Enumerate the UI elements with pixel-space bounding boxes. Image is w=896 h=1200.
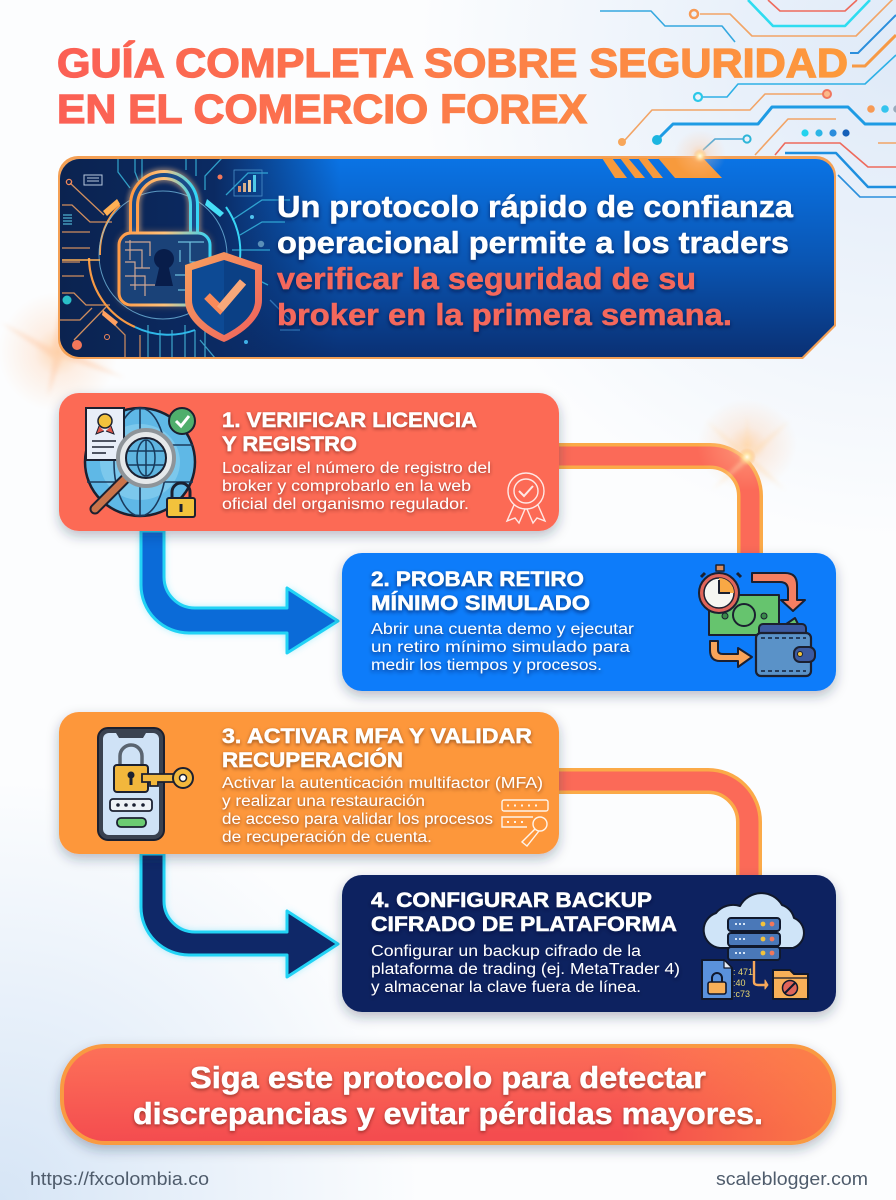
icon: phone with padlock and key xyxy=(98,728,193,840)
arrow: step 3 to step 4 xyxy=(559,781,749,875)
step 1 text: oficial del organismo regulador. xyxy=(222,496,469,513)
hero statement: operacional permite a los traders xyxy=(277,225,789,260)
hero statement: verificar la seguridad de su xyxy=(277,261,696,296)
arrow: step 1 to step 2 xyxy=(559,399,797,553)
step 1 heading xyxy=(222,409,477,456)
step 3 heading xyxy=(222,725,532,772)
step 4 text: Configurar un backup cifrado de la xyxy=(371,943,641,960)
step 4 heading: CIFRADO DE PLATAFORMA xyxy=(371,913,677,936)
step 4 heading: 4. CONFIGURAR BACKUP xyxy=(371,889,652,912)
footer: credit: scaleblogger.com xyxy=(716,1169,868,1189)
step 1 text: Localizar el número de registro del xyxy=(222,460,491,477)
icon: globe and magnifier xyxy=(85,408,195,517)
code snippets beside file: :40 xyxy=(733,978,746,988)
step 2 heading: MÍNIMO SIMULADO xyxy=(371,592,590,615)
callout: closing message: discrepancias y evitar pérdidas mayores. xyxy=(133,1096,763,1131)
arrow: step 3 down to step 4 xyxy=(141,854,338,977)
icon: cloud, servers, encrypted file and folder xyxy=(702,893,808,999)
circuit decoration top right xyxy=(600,0,896,197)
panel: step 2 xyxy=(342,553,836,691)
footer: source url: https://fxcolombia.co xyxy=(30,1169,209,1189)
step 4 heading xyxy=(371,889,677,936)
step 3 text: de acceso para validar los procesos xyxy=(222,811,493,828)
step 1 heading: 1. VERIFICAR LICENCIA xyxy=(222,409,477,432)
step 3 text: y realizar una restauración xyxy=(222,793,425,810)
hero statement xyxy=(277,189,794,332)
step 3 heading: RECUPERACIÓN xyxy=(222,748,403,772)
step 2 text: Abrir una cuenta demo y ejecutar xyxy=(371,621,634,638)
panel: step 3 xyxy=(59,712,559,854)
callout: closing message xyxy=(60,1044,836,1145)
icon: stopwatch, money and wallet xyxy=(699,565,815,676)
step 3 text: de recuperación de cuenta. xyxy=(222,829,432,846)
hero statement: broker en la primera semana. xyxy=(277,297,732,332)
arrow: step 1 down to step 2 xyxy=(141,531,338,653)
step 4 text: y almacenar la clave fuera de línea. xyxy=(371,979,641,996)
step 4 text xyxy=(371,943,680,996)
code snippets beside file: : 471 xyxy=(733,967,753,977)
step 2 heading xyxy=(371,568,590,615)
step 1 text xyxy=(222,460,491,513)
hero statement: Un protocolo rápido de confianza xyxy=(277,189,794,224)
title: GUÍA COMPLETA SOBRE SEGURIDAD xyxy=(57,40,848,86)
decorative glow: bottom left of hero xyxy=(0,292,125,412)
panel: hero banner xyxy=(58,156,838,360)
hero corner stripes xyxy=(602,158,722,178)
step 2 text xyxy=(371,621,634,674)
title xyxy=(57,40,848,132)
code snippets beside file: :c73 xyxy=(733,989,750,999)
title: EN EL COMERCIO FOREX xyxy=(57,86,587,132)
decorative glow: top of hero xyxy=(674,130,726,178)
step 3 heading: 3. ACTIVAR MFA Y VALIDAR xyxy=(222,725,532,748)
step 4 text: plataforma de trading (ej. MetaTrader 4) xyxy=(371,961,680,978)
step 1 text: broker y comprobarlo en la web xyxy=(222,478,471,495)
callout: closing message: Siga este protocolo para detectar xyxy=(190,1060,706,1095)
icon: password and key outline xyxy=(502,800,548,846)
panel: step 4 xyxy=(342,875,836,1012)
step 2 text: un retiro mínimo simulado para xyxy=(371,639,630,656)
panel: step 1 xyxy=(59,393,559,531)
code snippets beside file xyxy=(733,967,753,999)
step 2 heading: 2. PROBAR RETIRO xyxy=(371,568,584,591)
step 3 text: Activar la autenticación multifactor (MFA) xyxy=(222,775,543,792)
hero illustration: circuit padlock and shield xyxy=(60,158,300,358)
step 3 text xyxy=(222,775,543,846)
step 2 text: medir los tiempos y procesos. xyxy=(371,657,602,674)
icon: rosette outline xyxy=(507,473,545,523)
step 1 heading: Y REGISTRO xyxy=(222,433,357,456)
